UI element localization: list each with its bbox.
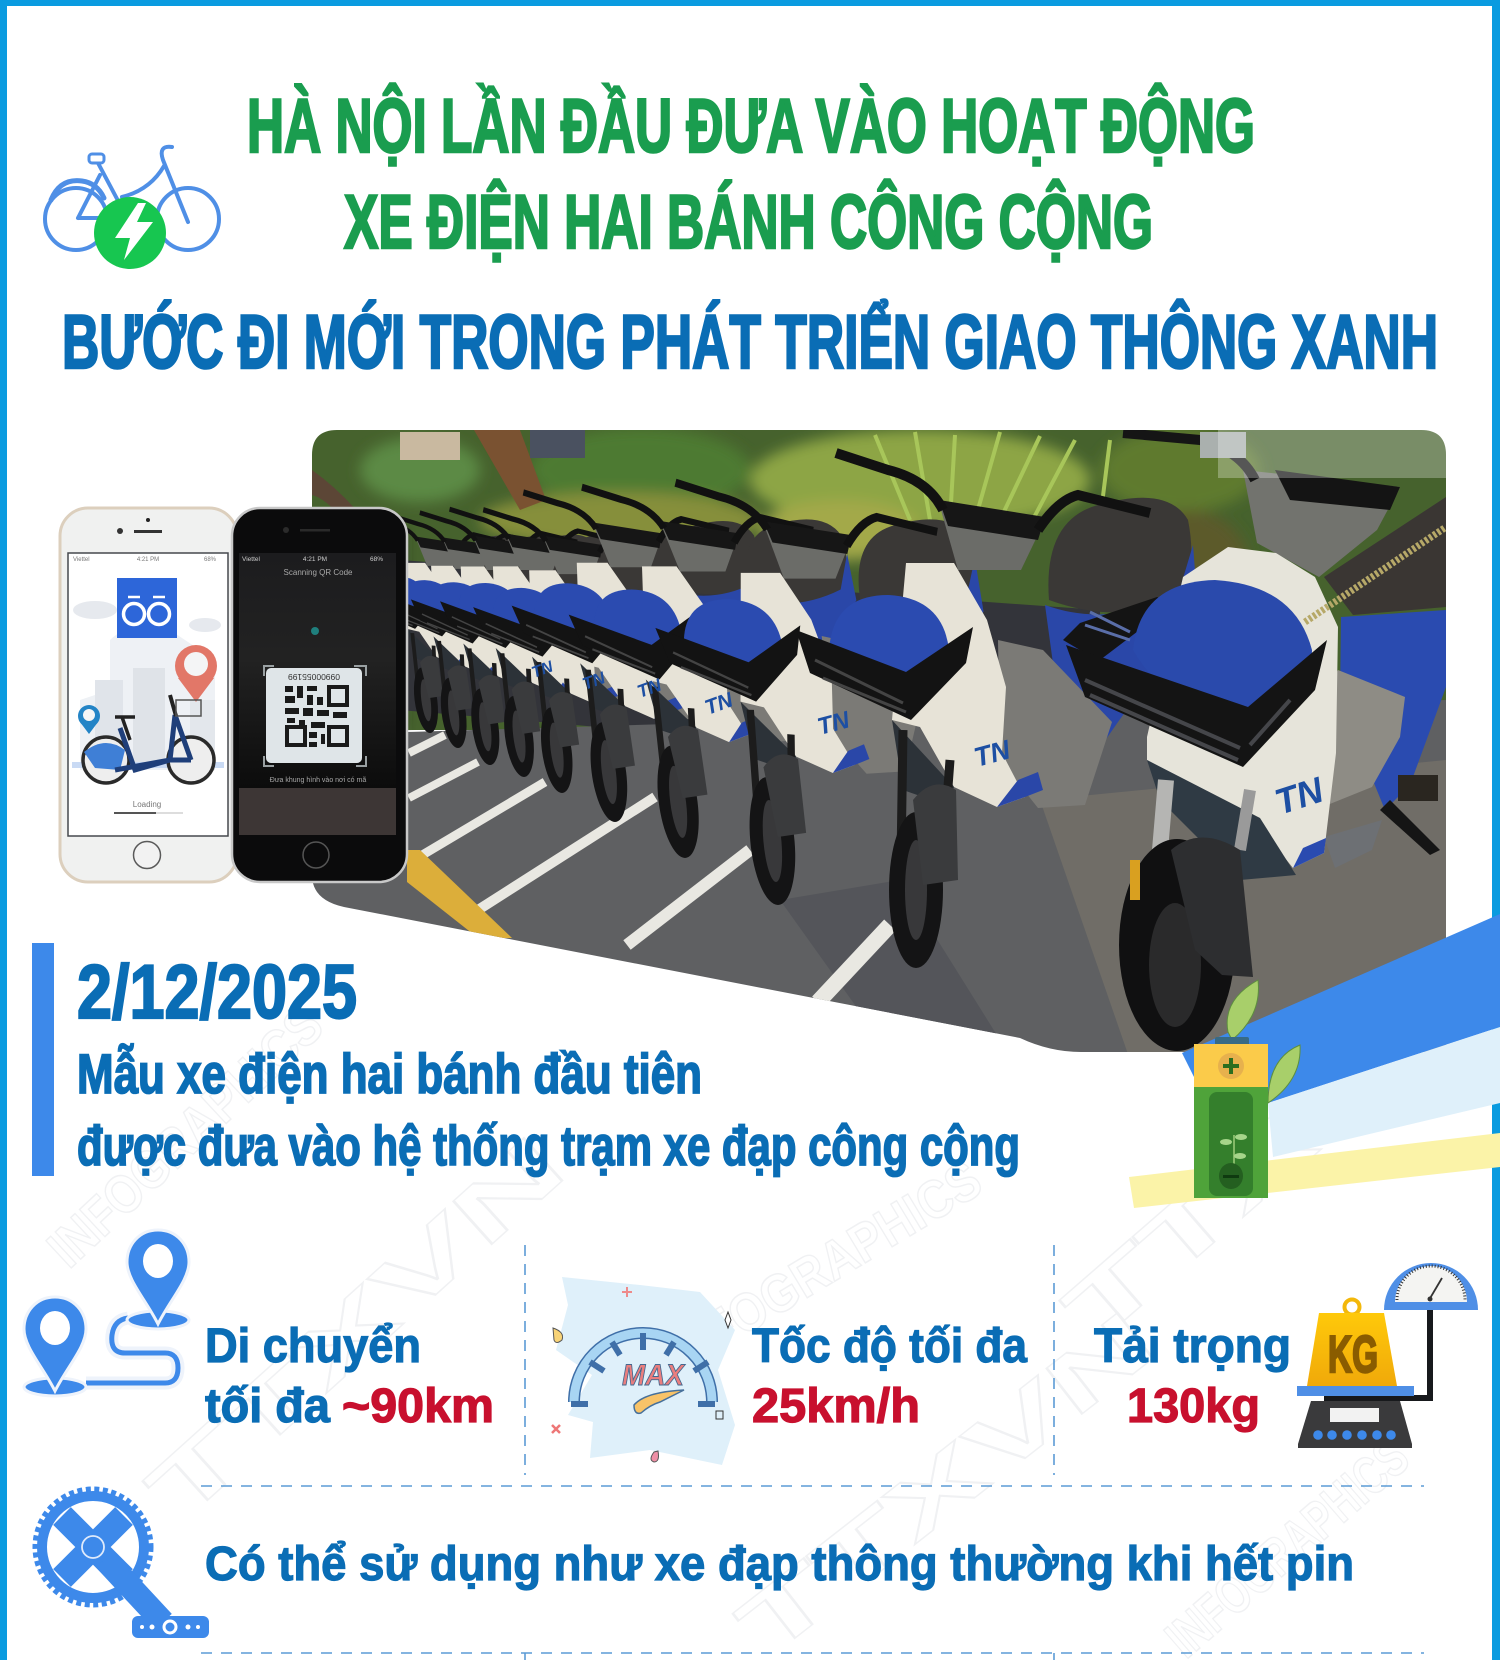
- photo: front scooter: TN: [1270, 768, 1329, 823]
- photo: row of parked scooters: TN: [971, 734, 1014, 773]
- watermarks: [36, 946, 1500, 1660]
- watermarks: TTXVN: [1046, 946, 1500, 1359]
- app screen illustration: 4:21 PM: [137, 557, 159, 563]
- photo: newspaper watermark: [1218, 430, 1446, 478]
- QR code card: [264, 666, 366, 766]
- stat: travel distance: [24, 1230, 494, 1433]
- stat: travel distance: tối đa: [205, 1380, 330, 1433]
- app screen illustration: Loading: [133, 800, 161, 809]
- icon: green battery with leaves: [1194, 980, 1300, 1198]
- icon: black phone scanning QR code: 4:21 PM: [303, 556, 327, 563]
- app screen illustration: [72, 557, 224, 814]
- stat: load capacity: [1094, 1263, 1478, 1448]
- QR code card: 09900055199: [288, 672, 340, 682]
- decorative ribbon bands: [1129, 914, 1500, 1208]
- icon: black phone scanning QR code: Đưa khung hình vào nơi có mã: [270, 777, 366, 784]
- divider: horizontal dashes: [201, 1486, 1424, 1653]
- watermarks: INFOGRAPHICS: [36, 995, 335, 1279]
- photo: row of parked scooters: TN: [530, 658, 556, 682]
- stat: travel distance: ~90km: [342, 1380, 494, 1433]
- description text: Mẫu xe điện hai bánh đầu tiên: [77, 1042, 702, 1105]
- photo: row of parked scooters: TN: [580, 668, 608, 694]
- stat: load capacity: 130kg: [1127, 1380, 1260, 1433]
- photo background: trees and greenery: [312, 430, 1446, 732]
- description text: được đưa vào hệ thống trạm xe đạp công cộng: [77, 1114, 1020, 1177]
- icon: black phone scanning QR code: Scanning QR Code: [284, 568, 353, 577]
- photo: row of parked scooters: [353, 453, 1198, 968]
- feature: pedal use when battery is out: Có thể sử dụng như xe đạp thông thường khi hết pin: [205, 1538, 1354, 1591]
- icon: black phone scanning QR code: Viettel: [242, 556, 261, 563]
- divider: next row ticks: [525, 1653, 1054, 1660]
- stat: travel distance: Di chuyển: [205, 1320, 421, 1373]
- app screen illustration: 68%: [204, 557, 217, 563]
- title: main heading: [247, 84, 1255, 265]
- icon: black phone scanning QR code: 68%: [370, 556, 383, 563]
- icon: white phone with bike app: [60, 508, 237, 882]
- description text: [77, 1042, 1020, 1177]
- icon: weighing scale with KG weight: KG: [1328, 1326, 1378, 1384]
- icon: electric bicycle: [45, 147, 219, 269]
- photo: front scooter: [1063, 432, 1446, 1051]
- panel: hero photo of electric bikes: [312, 428, 1452, 1060]
- icon: bicycle crank and pedal: [36, 1490, 209, 1638]
- date accent bar: [32, 943, 54, 1176]
- feature: pedal use when battery is out: [36, 1490, 1354, 1638]
- photo: row of parked scooters: TN: [702, 688, 737, 720]
- photo: row of parked scooters: TN: [635, 674, 665, 702]
- watermarks: INFOGRAPHICS: [652, 1149, 992, 1386]
- icon: weighing scale with KG weight: [1297, 1263, 1478, 1448]
- icon: route with two map pins: [24, 1230, 189, 1396]
- app screen illustration: Viettel: [73, 557, 90, 563]
- stat: maximum speed: 25km/h: [752, 1380, 920, 1433]
- stat: maximum speed: Tốc độ tối đa: [752, 1320, 1027, 1373]
- stat: maximum speed: [552, 1277, 1027, 1465]
- icon: black phone scanning QR code: [232, 508, 407, 882]
- divider: vertical dashes: [525, 1245, 1054, 1475]
- icon: speedometer gauge: MAX: [622, 1359, 686, 1392]
- stat: load capacity: Tải trọng: [1094, 1320, 1291, 1373]
- photo: pavement and parking lines: [312, 700, 1446, 1060]
- date: 2/12/2025: [77, 950, 357, 1035]
- icon: speedometer gauge: [552, 1277, 735, 1465]
- watermarks: TTXVN: [129, 1117, 582, 1538]
- photo: row of parked scooters: TN: [815, 706, 853, 741]
